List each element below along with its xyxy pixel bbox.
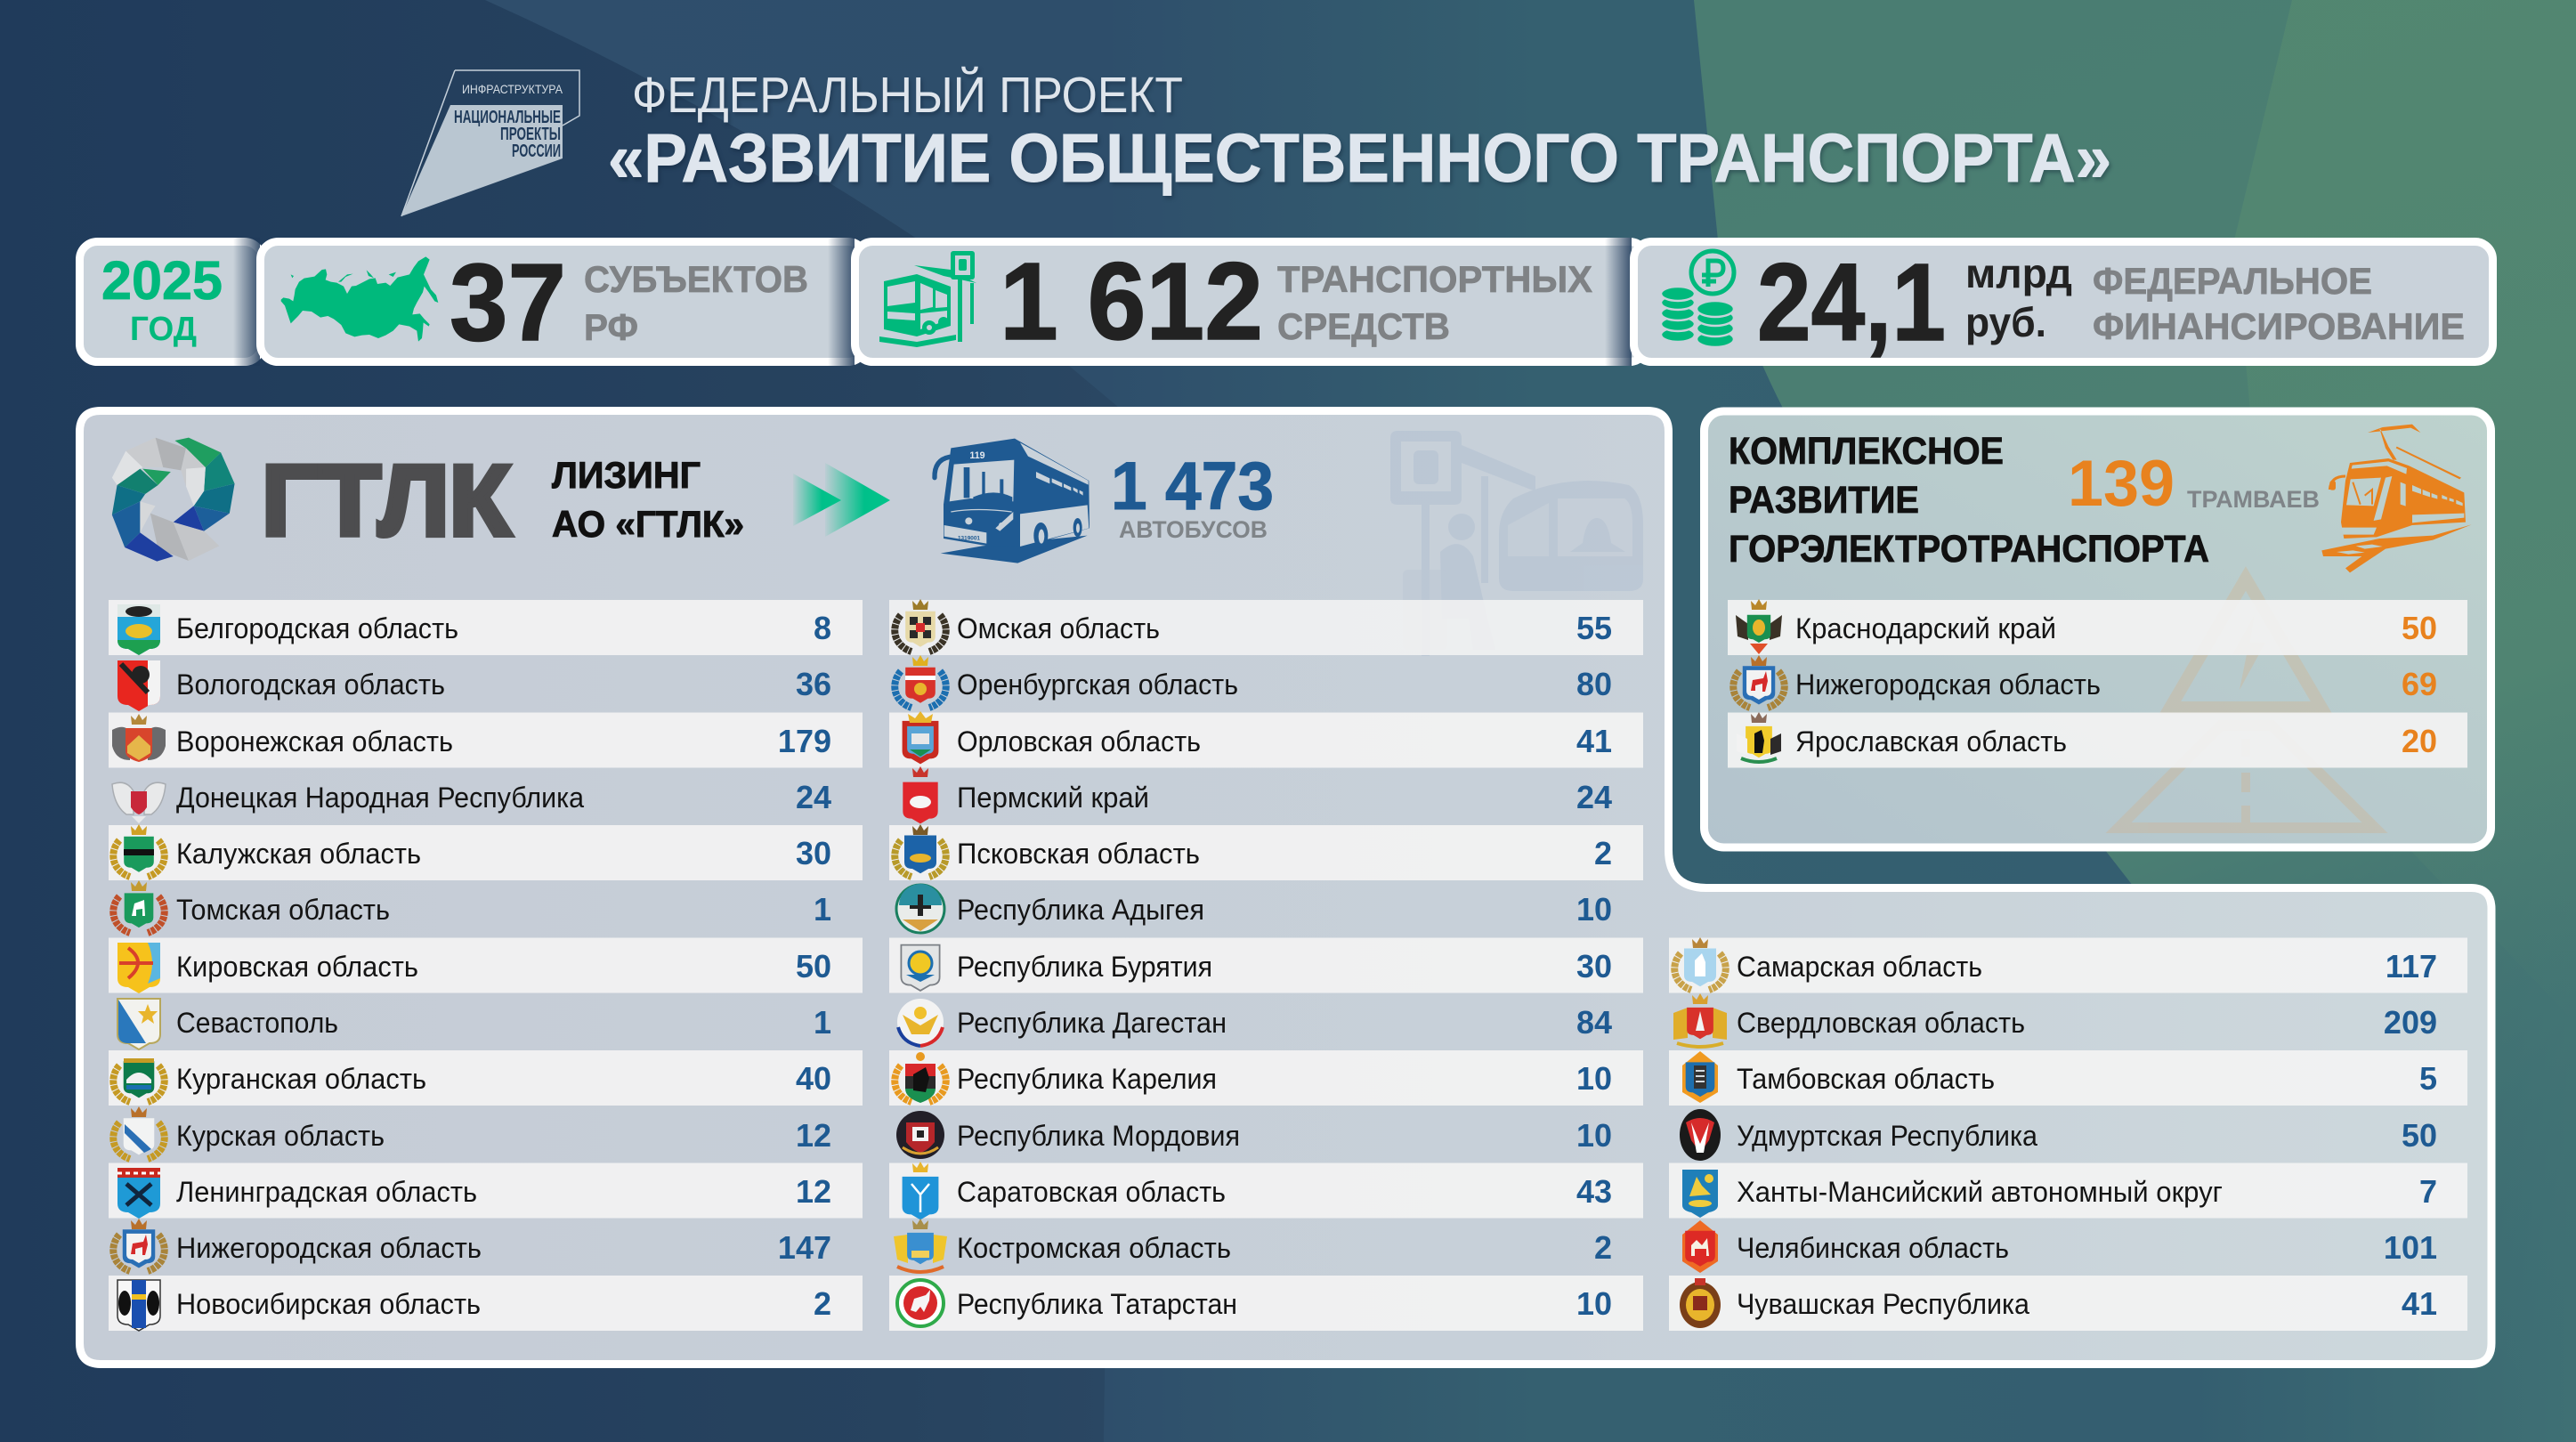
row: Воронежская область: Воронежская область [176, 725, 453, 757]
icon: blue bus [935, 439, 1090, 563]
row: Нижегородская область: Нижегородская область [176, 1232, 482, 1264]
row: Чувашская Республика [1680, 1278, 2437, 1328]
row: Ленинградская область [117, 1168, 831, 1219]
row: Омская область: 55 [1576, 610, 1612, 646]
text: leasing label [552, 454, 744, 545]
coat of arms: Белгородская [117, 604, 160, 655]
row: Краснодарский край: 50 [2402, 610, 2437, 646]
row: Оренбургская область [895, 655, 1612, 708]
row: Пермский край: 24 [1576, 779, 1612, 815]
text: leasing label: ЛИЗИНГ [552, 454, 701, 496]
text: trams total: ТРАМВАЕВ [2187, 486, 2320, 513]
text: trams total: 139 [2068, 448, 2175, 520]
table: left column [109, 600, 863, 1331]
row: Костромская область [894, 1219, 1612, 1272]
coat of arms: ДНР [112, 782, 166, 823]
icon: coins with ruble [1661, 251, 1734, 347]
panel: regions count [260, 238, 865, 366]
row: Нижегородская область: 69 [2402, 666, 2437, 702]
row: Свердловская область: Свердловская область [1737, 1007, 2025, 1039]
logo: национальные проекты: НАЦИОНАЛЬНЫЕ [454, 108, 561, 127]
panel: funding: ФЕДЕРАЛЬНОЕ [2093, 260, 2372, 302]
row: Ленинградская область: 12 [796, 1173, 831, 1210]
row: Донецкая Народная Республика [112, 779, 831, 823]
icon: blue bus: 1319001 [958, 536, 980, 542]
coat of arms: Нижегородская [113, 1219, 165, 1271]
row: Чувашская Республика: Чувашская Республика [1737, 1288, 2029, 1320]
panel: bus leasing [80, 411, 2491, 1364]
row: Оренбургская область: 80 [1576, 666, 1612, 702]
row: Республика Мордовия [896, 1111, 1612, 1159]
text: trams total [2068, 448, 2320, 520]
panel: funding: 24,1 [1757, 242, 1946, 364]
coat of arms: Тамбовская [1682, 1051, 1718, 1103]
row: Ханты-Мансийский автономный округ: 7 [2419, 1173, 2437, 1210]
row: Орловская область: Орловская область [957, 725, 1201, 757]
row: Самарская область: Самарская область [1737, 951, 1982, 983]
heading: complex development [1729, 430, 2209, 571]
row: Севастополь [117, 999, 831, 1049]
row: Новосибирская область: 2 [814, 1285, 831, 1322]
panel: year [80, 238, 262, 366]
row: Нижегородская область [113, 1219, 831, 1271]
coat of arms: Мордовия [896, 1111, 944, 1159]
coat of arms: Кировская [117, 943, 160, 993]
heading: complex development: РАЗВИТИЕ [1729, 479, 1919, 522]
row: Саратовская область: 43 [1576, 1173, 1612, 1210]
row: Тамбовская область: Тамбовская область [1737, 1063, 1995, 1095]
coat of arms: Бурятия [901, 945, 940, 991]
row: Республика Адыгея [896, 884, 1612, 933]
row: Краснодарский край: Краснодарский край [1795, 612, 2056, 644]
row: Ханты-Мансийский автономный округ: Ханты-Мансийский автономный округ [1737, 1176, 2223, 1208]
panel: vehicles count [855, 238, 1647, 366]
row: Саратовская область [903, 1162, 1612, 1219]
row: Орловская область [903, 711, 1612, 764]
coat of arms: Краснодарский [1736, 599, 1782, 654]
coat of arms: Омская [895, 599, 946, 652]
row: Свердловская область: 209 [2384, 1004, 2437, 1041]
text: buses total: 1 473 [1111, 449, 1274, 524]
row: Самарская область: 117 [2386, 948, 2437, 984]
row: Вологодская область [117, 660, 831, 711]
row: Курганская область: Курганская область [176, 1063, 426, 1095]
row: Донецкая Народная Республика: Донецкая Народная Республика [176, 782, 584, 814]
row: Омская область [895, 599, 1612, 652]
table: middle column [889, 599, 1643, 1331]
row: Республика Бурятия [901, 945, 1612, 991]
title: «РАЗВИТИЕ ОБЩЕСТВЕННОГО ТРАНСПОРТА» [608, 120, 2111, 197]
row: Калужская область [113, 824, 831, 877]
row: Белгородская область: 8 [814, 610, 831, 646]
row: Кировская область [117, 943, 831, 993]
row: Нижегородская область: 147 [778, 1229, 831, 1266]
row: Курская область: 12 [796, 1117, 831, 1154]
coat of arms: Орловская [903, 711, 938, 764]
row: Пермский край: Пермский край [957, 782, 1149, 814]
row: Ярославская область [1737, 712, 2437, 762]
row: Республика Карелия: Республика Карелия [957, 1063, 1217, 1095]
row: Пермский край [903, 766, 1612, 823]
icon: green bus at stop [879, 251, 976, 347]
panel: year: ГОД [130, 311, 197, 348]
row: Республика Дагестан [897, 999, 1612, 1046]
row: Ярославская область: 20 [2402, 723, 2437, 759]
row: Севастополь: Севастополь [176, 1007, 338, 1039]
row: Удмуртская Республика [1680, 1109, 2437, 1161]
coat of arms: ХМАО [1682, 1170, 1718, 1218]
row: Чувашская Республика: 41 [2402, 1285, 2437, 1322]
text: buses total: АВТОБУСОВ [1119, 516, 1268, 543]
row: Псковская область: 2 [1594, 835, 1612, 871]
row: Республика Карелия: 10 [1576, 1060, 1612, 1097]
row: Новосибирская область: Новосибирская область [176, 1288, 481, 1320]
panel: year: 2025 [101, 250, 223, 311]
row: Воронежская область [112, 714, 831, 762]
coat of arms: Оренбургская [895, 655, 946, 708]
coat of arms: Костромская [894, 1219, 947, 1272]
coat of arms: Курская [113, 1106, 165, 1159]
row: Республика Мордовия: 10 [1576, 1117, 1612, 1154]
row: Севастополь: 1 [814, 1004, 831, 1041]
row: Краснодарский край [1736, 599, 2437, 654]
panel: regions count: СУБЪЕКТОВ [584, 258, 808, 300]
coat of arms: Вологодская [117, 660, 160, 711]
coat of arms: Чувашия [1680, 1278, 1721, 1328]
coat of arms: Псковская [895, 824, 946, 877]
logo: национальные проекты: РОССИИ [512, 142, 561, 161]
row: Республика Мордовия: Республика Мордовия [957, 1120, 1240, 1152]
coat of arms: Челябинская [1682, 1220, 1718, 1273]
panel: funding: млрд [1965, 250, 2072, 296]
row: Белгородская область: Белгородская область [176, 612, 458, 644]
heading: complex development: ГОРЭЛЕКТРОТРАНСПОРТА [1729, 528, 2209, 571]
arrow: double chevron [793, 463, 890, 537]
panel: funding: руб. [1965, 299, 2046, 345]
logo: GTLK ring [112, 438, 235, 562]
table: right column [1669, 937, 2467, 1331]
text: leasing label: АО «ГТЛК» [552, 503, 744, 545]
row: Удмуртская Республика: 50 [2402, 1117, 2437, 1154]
row: Республика Адыгея: Республика Адыгея [957, 894, 1204, 926]
row: Воронежская область: 179 [778, 723, 831, 759]
row: Республика Дагестан: Республика Дагестан [957, 1007, 1227, 1039]
coat of arms: Карелия [895, 1052, 946, 1103]
icon: map of Russia [281, 256, 438, 342]
row: Ханты-Мансийский автономный округ [1682, 1170, 2437, 1218]
row: Челябинская область [1682, 1220, 2437, 1273]
row: Кировская область: Кировская область [176, 951, 418, 983]
row: Челябинская область: 101 [2384, 1229, 2437, 1266]
heading: complex development: КОМПЛЕКСНОЕ [1729, 430, 2004, 473]
row: Вологодская область: 36 [796, 666, 831, 702]
row: Костромская область: Костромская область [957, 1232, 1231, 1264]
row: Курганская область [113, 1058, 831, 1102]
row: Псковская область [895, 824, 1612, 877]
panel: funding [1634, 242, 2492, 364]
panel: regions count: РФ [584, 306, 638, 348]
row: Томская область [113, 880, 831, 933]
row: Республика Татарстан [897, 1280, 1612, 1326]
row: Республика Татарстан: Республика Татарстан [957, 1288, 1237, 1320]
row: Белгородская область [117, 604, 831, 655]
panel: vehicles count: 1 612 [1000, 241, 1263, 363]
row: Томская область: Томская область [176, 894, 390, 926]
row: Новосибирская область [117, 1280, 831, 1331]
row: Удмуртская Республика: Удмуртская Республика [1737, 1120, 2037, 1152]
icon: blue bus: 119 [969, 450, 985, 461]
coat of arms: Дагестан [897, 999, 944, 1046]
row: Калужская область: Калужская область [176, 838, 421, 870]
row: Томская область: 1 [814, 891, 831, 928]
row: Челябинская область: Челябинская область [1737, 1232, 2009, 1264]
row: Ярославская область: Ярославская область [1795, 725, 2067, 757]
row: Псковская область: Псковская область [957, 838, 1200, 870]
row: Оренбургская область: Оренбургская область [957, 668, 1238, 701]
panel: vehicles count: СРЕДСТВ [1277, 305, 1450, 347]
coat of arms: Воронежская [112, 714, 166, 762]
row: Орловская область: 41 [1576, 723, 1612, 759]
row: Саратовская область: Саратовская область [957, 1176, 1226, 1208]
row: Республика Бурятия: 30 [1576, 948, 1612, 984]
row: Ленинградская область: Ленинградская область [176, 1176, 477, 1208]
coat of arms: Ленинградская [117, 1168, 160, 1219]
coat of arms: Адыгея [896, 884, 944, 933]
row: Республика Адыгея: 10 [1576, 891, 1612, 928]
row: Нижегородская область: Нижегородская область [1795, 668, 2101, 701]
panel: funding: ФИНАНСИРОВАНИЕ [2093, 305, 2465, 347]
row: Донецкая Народная Республика: 24 [796, 779, 831, 815]
coat of arms: Нижегородская [1733, 655, 1785, 708]
coat of arms: Самарская [1674, 937, 1726, 990]
coat of arms: Пермский [903, 766, 938, 823]
row: Тамбовская область: 5 [2419, 1060, 2437, 1097]
row: Вологодская область: Вологодская область [176, 668, 445, 701]
row: Самарская область [1674, 937, 2437, 990]
icon: ghost bus stop [1390, 431, 1643, 656]
coat of arms: Курганская [113, 1058, 165, 1102]
row: Свердловская область [1673, 993, 2437, 1047]
coat of arms: Томская [113, 880, 165, 933]
title: ФЕДЕРАЛЬНЫЙ ПРОЕКТ [632, 66, 1183, 124]
logo: национальные проекты: ИНФРАСТРУКТУРА [462, 82, 563, 96]
panel: complex electric transport [1704, 411, 2491, 847]
table: tram regions [1728, 599, 2467, 767]
coat of arms: Севастополь [117, 999, 160, 1049]
coat of arms: Свердловская [1673, 993, 1727, 1047]
row: Тамбовская область [1682, 1051, 2437, 1103]
coat of arms: Ярославская [1737, 712, 1781, 762]
row: Костромская область: 2 [1594, 1229, 1612, 1266]
row: Курская область: Курская область [176, 1120, 385, 1152]
row: Республика Карелия [895, 1052, 1612, 1103]
logo: национальные проекты: ПРОЕКТЫ [500, 125, 561, 144]
coat of arms: Саратовская [903, 1162, 938, 1219]
logo: национальные проекты [401, 70, 579, 216]
row: Омская область: Омская область [957, 612, 1160, 644]
coat of arms: Удмуртия [1680, 1109, 1721, 1161]
coat of arms: Калужская [113, 824, 165, 877]
icon: ghost warning triangle and road [2118, 579, 2375, 828]
row: Республика Дагестан: 84 [1576, 1004, 1612, 1041]
coat of arms: Татарстан [897, 1280, 944, 1326]
panel: vehicles count: ТРАНСПОРТНЫХ [1277, 258, 1592, 300]
row: Кировская область: 50 [796, 948, 831, 984]
row: Курганская область: 40 [796, 1060, 831, 1097]
row: Курская область [113, 1106, 831, 1159]
icon: orange tram [2321, 425, 2472, 572]
row: Республика Татарстан: 10 [1576, 1285, 1612, 1322]
logo: GTLK wordmark: ГТЛК [262, 445, 512, 556]
row: Нижегородская область [1733, 655, 2437, 708]
panel: regions count: 37 [450, 242, 566, 364]
row: Калужская область: 30 [796, 835, 831, 871]
row: Республика Бурятия: Республика Бурятия [957, 951, 1212, 983]
title [608, 66, 2111, 197]
coat of arms: Новосибирская [117, 1280, 160, 1331]
